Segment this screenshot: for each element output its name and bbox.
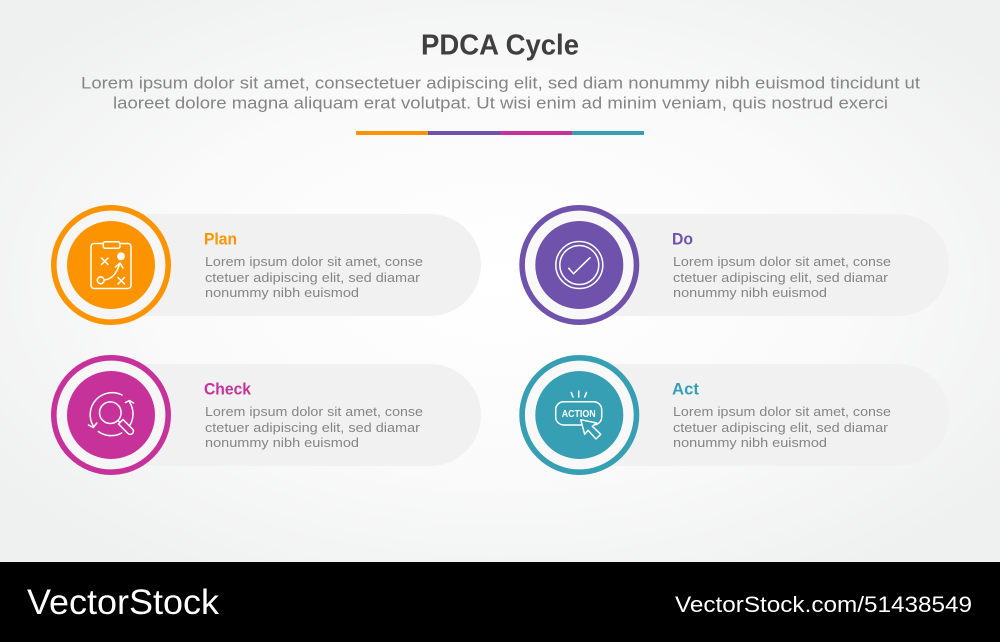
plan body text bbox=[205, 254, 423, 300]
do body text: Lorem ipsum dolor sit amet, conse bbox=[673, 254, 891, 269]
do pill background bbox=[579, 214, 949, 316]
check heading: Check bbox=[204, 380, 251, 398]
plan circle badge bbox=[54, 208, 168, 322]
do body text: nonummy nibh euismod bbox=[673, 285, 827, 300]
subtitle text bbox=[81, 74, 920, 112]
icon: magnifier with cycle arrows bbox=[88, 393, 134, 436]
check body text: ctetuer adipiscing elit, sed diamar bbox=[205, 420, 421, 435]
panel: Check bbox=[54, 358, 481, 472]
panel: Act bbox=[522, 358, 949, 472]
plan heading: Plan bbox=[204, 230, 237, 248]
check body text: nonummy nibh euismod bbox=[205, 435, 359, 450]
act pill background bbox=[579, 364, 949, 466]
act heading: Act bbox=[672, 380, 699, 398]
do heading: Do bbox=[672, 230, 693, 248]
plan body text: Lorem ipsum dolor sit amet, conse bbox=[205, 254, 423, 269]
icon: check mark in circle bbox=[556, 242, 603, 288]
do body text bbox=[673, 254, 891, 300]
check body text: Lorem ipsum dolor sit amet, conse bbox=[205, 404, 423, 419]
plan pill background bbox=[111, 214, 481, 316]
act body text: ctetuer adipiscing elit, sed diamar bbox=[673, 420, 889, 435]
panel: Plan bbox=[54, 208, 481, 322]
icon: strategy clipboard bbox=[91, 242, 131, 288]
check circle badge bbox=[54, 358, 168, 472]
act body text: Lorem ipsum dolor sit amet, conse bbox=[673, 404, 891, 419]
footer logo text: VectorStock bbox=[27, 583, 220, 622]
check pill background bbox=[111, 364, 481, 466]
panel: Do bbox=[522, 208, 949, 322]
subtitle text: laoreet dolore magna aliquam erat volutpat. Ut wisi enim ad minim veniam, quis nostrud exerci bbox=[113, 94, 888, 112]
footer image id: VectorStock.com/51438549 bbox=[675, 592, 972, 617]
plan body text: ctetuer adipiscing elit, sed diamar bbox=[205, 270, 421, 285]
four-colour divider bar bbox=[356, 131, 644, 135]
subtitle text: Lorem ipsum dolor sit amet, consectetuer adipiscing elit, sed diam nonummy nibh euismod tincidunt ut bbox=[81, 74, 920, 92]
icon: action button with cursor bbox=[556, 391, 602, 439]
title: PDCA Cycle bbox=[421, 30, 579, 62]
footer bar bbox=[0, 562, 1000, 642]
icon: action button with cursor: ACTION bbox=[562, 409, 596, 420]
check body text bbox=[205, 404, 423, 450]
plan body text: nonummy nibh euismod bbox=[205, 285, 359, 300]
act circle badge bbox=[522, 358, 636, 472]
act body text bbox=[673, 404, 891, 450]
do circle badge bbox=[522, 208, 636, 322]
act body text: nonummy nibh euismod bbox=[673, 435, 827, 450]
do body text: ctetuer adipiscing elit, sed diamar bbox=[673, 270, 889, 285]
